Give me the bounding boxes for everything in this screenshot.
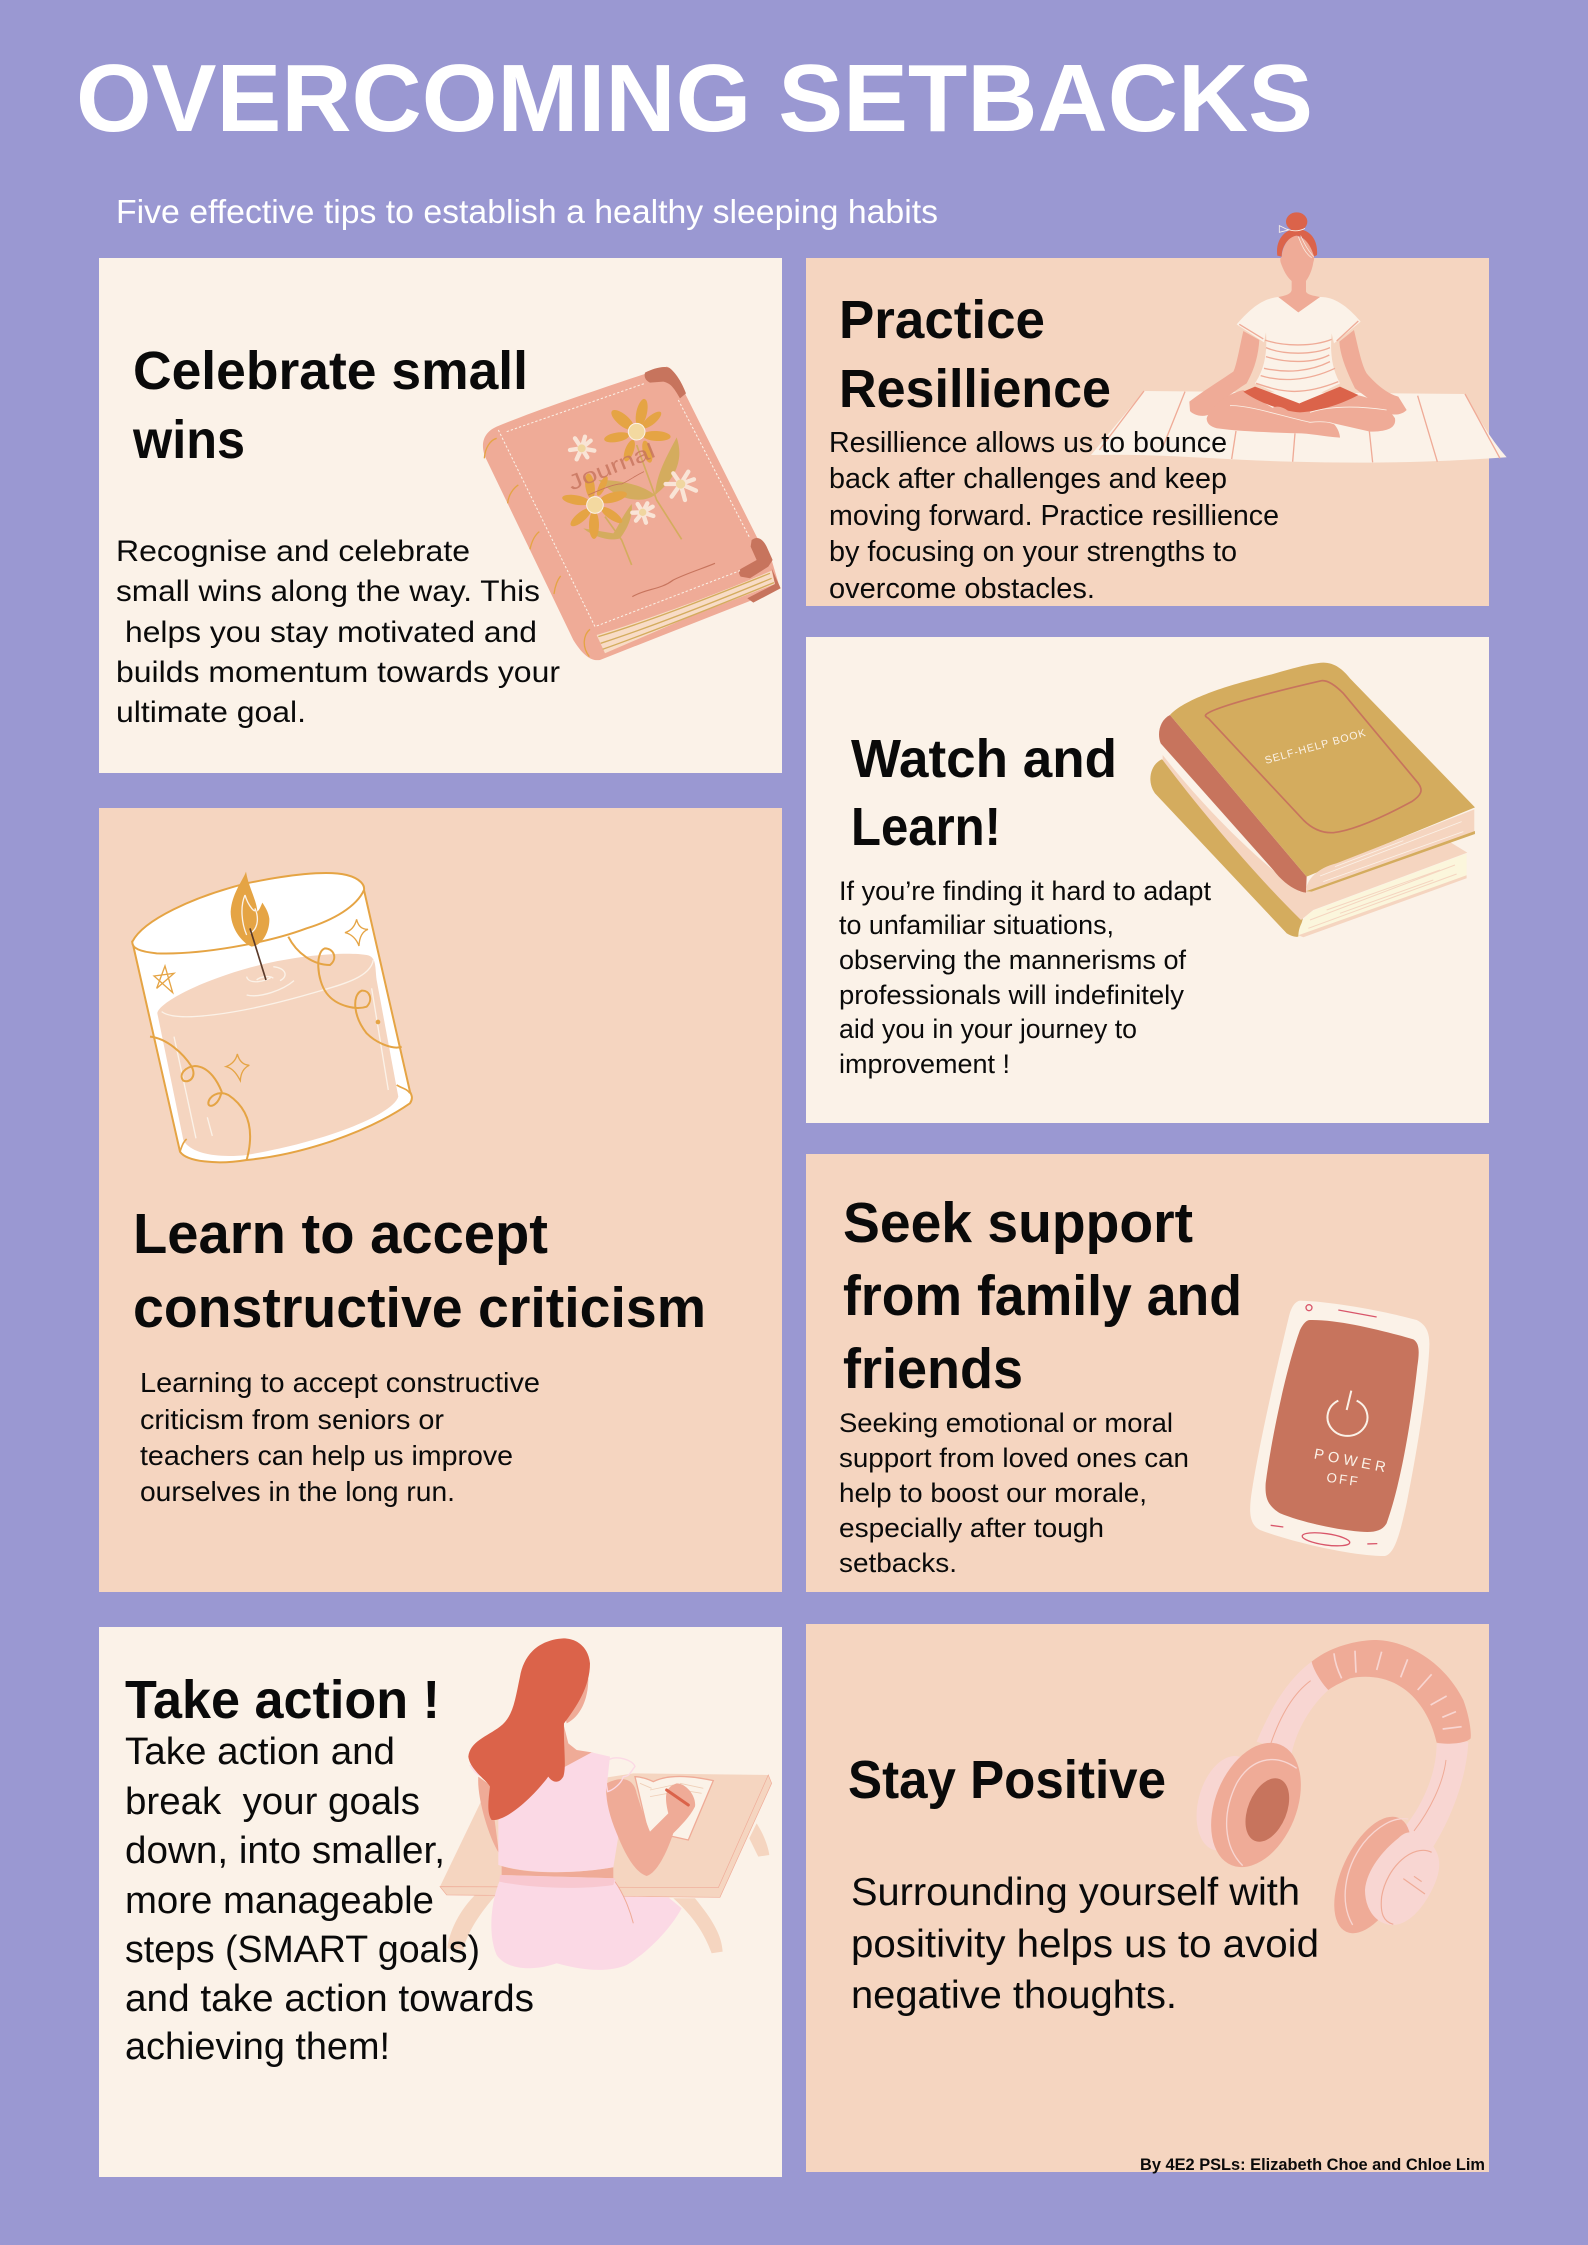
body text: back after challenges and keep	[829, 463, 1227, 495]
icon: phone	[1250, 1301, 1429, 1556]
body text: ultimate goal.	[116, 696, 306, 729]
body text: builds momentum towards your	[116, 656, 560, 689]
heading: Learn!	[851, 797, 1001, 857]
heading	[851, 729, 1117, 857]
icon: phone: OFF	[1326, 1470, 1361, 1489]
body text	[839, 876, 1211, 1079]
panel: celebrate small wins	[99, 258, 782, 773]
body text: ourselves in the long run.	[140, 1476, 455, 1507]
heading	[133, 1202, 706, 1340]
body text: Learning to accept constructive	[140, 1367, 540, 1398]
subtitle: Five effective tips to establish a healthy sleeping habits	[116, 193, 938, 230]
body text	[839, 1408, 1189, 1578]
body text	[125, 1731, 534, 2068]
body text: help to boost our morale,	[839, 1478, 1147, 1508]
illustration: woman writing at desk	[440, 1638, 772, 1970]
body text: teachers can help us improve	[140, 1440, 513, 1471]
panel: take action	[99, 1627, 782, 2177]
body text: If you’re finding it hard to adapt	[839, 876, 1211, 906]
body text: improvement !	[839, 1049, 1010, 1079]
body text: achieving them!	[125, 2026, 390, 2068]
body text: break your goals	[125, 1781, 420, 1823]
body text: Surrounding yourself with	[851, 1871, 1300, 1914]
body text	[140, 1367, 540, 1507]
body text: aid you in your journey to	[839, 1014, 1137, 1044]
body text: helps you stay motivated and	[125, 616, 537, 649]
panel: seek support	[806, 1154, 1489, 1592]
body text: positivity helps us to avoid	[851, 1923, 1319, 1966]
body text: overcome obstacles.	[829, 573, 1095, 605]
illustration: meditating woman on mat	[1091, 212, 1507, 463]
icon: journal	[483, 367, 781, 660]
body text: Resillience allows us to bounce	[829, 427, 1227, 459]
body text: criticism from seniors or	[140, 1404, 444, 1435]
body text: Seeking emotional or moral	[839, 1408, 1173, 1438]
icon: self-help books: SELF-HELP BOOK	[1264, 727, 1367, 767]
heading: Watch and	[851, 729, 1117, 789]
heading: from family and	[843, 1264, 1242, 1328]
heading: constructive criticism	[133, 1276, 706, 1340]
body text: down, into smaller,	[125, 1830, 445, 1872]
heading: friends	[843, 1337, 1023, 1401]
heading	[839, 290, 1111, 419]
icon: candle	[132, 872, 412, 1162]
body text: moving forward. Practice resillience	[829, 500, 1279, 532]
body text: observing the mannerisms of	[839, 945, 1186, 975]
body text: to unfamiliar situations,	[839, 910, 1114, 940]
heading	[132, 341, 528, 470]
body text: professionals will indefinitely	[839, 980, 1184, 1010]
body text: Recognise and celebrate	[116, 535, 470, 568]
body text: setbacks.	[839, 1548, 957, 1578]
heading: Take action !	[125, 1670, 440, 1730]
body text: more manageable	[125, 1880, 434, 1922]
heading: Celebrate small	[133, 341, 528, 401]
heading	[843, 1191, 1242, 1401]
body text: especially after tough	[839, 1513, 1104, 1543]
icon: self-help books	[1150, 663, 1475, 937]
body text: steps (SMART goals)	[125, 1929, 480, 1971]
panel: watch and learn	[806, 637, 1489, 1123]
heading: wins	[132, 410, 245, 470]
body text	[116, 535, 560, 729]
panel: stay positive	[806, 1624, 1489, 2174]
body text: negative thoughts.	[851, 1974, 1177, 2017]
body text	[851, 1871, 1319, 2017]
body text	[829, 427, 1279, 605]
credit line: By 4E2 PSLs: Elizabeth Choe and Chloe Lim	[1140, 2156, 1485, 2174]
heading: Practice	[839, 290, 1045, 350]
heading: Stay Positive	[848, 1750, 1166, 1810]
title: OVERCOMING SETBACKS	[76, 45, 1313, 152]
body text: and take action towards	[125, 1978, 534, 2020]
icon: phone: POWER	[1313, 1447, 1391, 1477]
heading: Resillience	[839, 359, 1111, 419]
panel: accept criticism	[99, 808, 782, 1592]
heading: Seek support	[843, 1191, 1193, 1255]
heading: Learn to accept	[133, 1202, 548, 1266]
icon: headphones	[1187, 1640, 1471, 1945]
body text: Take action and	[125, 1731, 395, 1773]
body text: support from loved ones can	[839, 1443, 1189, 1473]
body text: by focusing on your strengths to	[829, 536, 1237, 568]
panel: practice resilience	[806, 212, 1507, 606]
body text: small wins along the way. This	[116, 575, 540, 608]
icon: journal: Journal	[565, 439, 659, 495]
